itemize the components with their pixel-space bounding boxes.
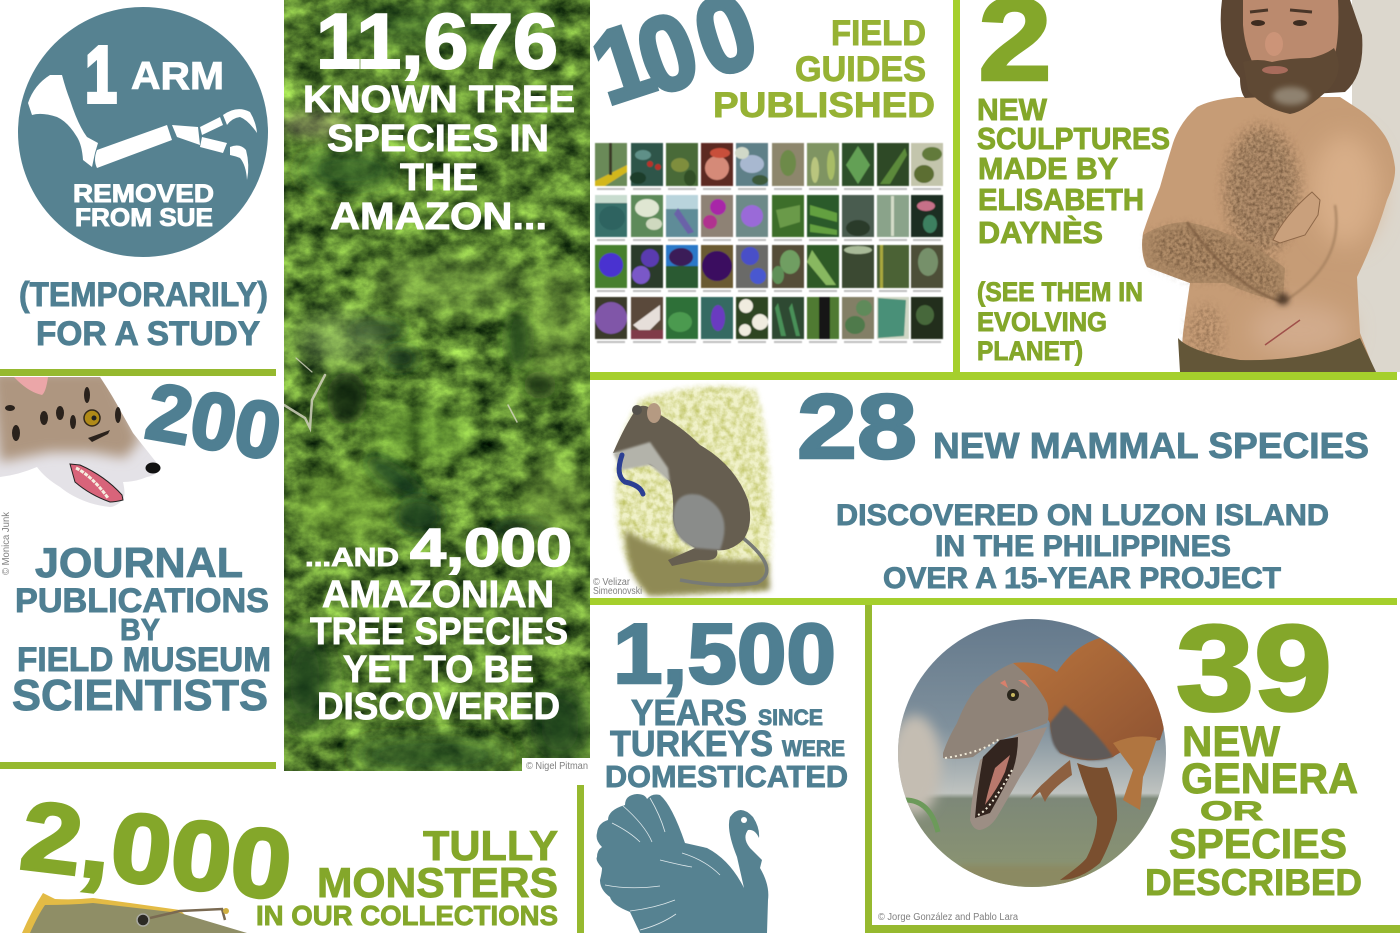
text: new sculptures: DAYNÈS bbox=[978, 215, 1103, 250]
illustration: wolf-like head bbox=[0, 377, 160, 507]
text: new sculptures: SCULPTURES bbox=[977, 121, 1170, 156]
panel: Sue arm bbox=[18, 7, 268, 257]
illustration: dinosaur in circle bbox=[889, 619, 1168, 887]
text: Luzon discovery: IN THE PHILIPPINES bbox=[935, 530, 1231, 563]
count: 1 arm: 1 bbox=[85, 30, 117, 119]
image grid: field guide plant photos bbox=[595, 143, 943, 343]
text: journal publications: JOURNAL bbox=[35, 539, 243, 586]
icon: turkey bbox=[597, 794, 768, 933]
text: new sculptures: MADE BY bbox=[978, 151, 1118, 186]
photo: Neanderthal sculpture bbox=[1142, 0, 1400, 372]
credit: Velizar Simeonovski: © Velizar bbox=[593, 577, 631, 588]
text: field guides published: FIELD bbox=[831, 14, 926, 53]
text: new genera or species described: NEW bbox=[1182, 718, 1280, 766]
text: new genera or species described: GENERA bbox=[1181, 755, 1358, 803]
text: temporarily for a study: (TEMPORARILY) bbox=[19, 276, 268, 314]
text: yet to be discovered bbox=[305, 518, 572, 728]
text: years since turkeys were domesticated bbox=[605, 692, 848, 794]
count: 200: 200 bbox=[140, 366, 287, 477]
text: field guides published: GUIDES bbox=[795, 50, 926, 89]
text: yet to be discovered: DISCOVERED bbox=[317, 686, 560, 728]
text: known tree species: KNOWN TREE bbox=[303, 79, 575, 121]
text: field guides published: PUBLISHED bbox=[713, 86, 935, 125]
illustration: Luzon shrew-rat bbox=[613, 387, 770, 596]
text: known tree species: THE bbox=[400, 157, 478, 199]
text: years since turkeys were domesticated: YEARS bbox=[631, 692, 747, 733]
count: 100 bbox=[579, 0, 771, 127]
label: removed from Sue: FROM SUE bbox=[75, 204, 213, 232]
text: journal publications: PUBLICATIONS bbox=[15, 582, 269, 620]
count: 2,000: 2,000 bbox=[16, 780, 298, 921]
illustration: Tully monster bbox=[22, 893, 247, 933]
text: years since turkeys were domesticated: TURKEYS bbox=[610, 723, 773, 764]
text: Luzon discovery bbox=[836, 499, 1329, 595]
count: 1,500: 1,500 bbox=[613, 607, 836, 702]
text: known tree species bbox=[303, 0, 575, 238]
text: years since turkeys were domesticated: SINCE bbox=[758, 705, 823, 730]
count: 39: 39 bbox=[1176, 600, 1332, 736]
credit: Monica Junk: © Monica Junk bbox=[1, 511, 12, 575]
text: new sculptures bbox=[977, 92, 1170, 250]
credit: Jorge González and Pablo Lara: © Jorge González and Pablo Lara bbox=[878, 912, 1018, 923]
text: known tree species: AMAZON... bbox=[330, 196, 547, 238]
text: see them in Evolving Planet: PLANET) bbox=[977, 336, 1083, 366]
text: journal publications: FIELD MUSEUM bbox=[17, 641, 271, 679]
circle badge bbox=[18, 7, 268, 257]
text: years since turkeys were domesticated: WERE bbox=[782, 736, 845, 761]
text: new genera or species described bbox=[1145, 718, 1362, 903]
text: yet to be discovered: 4,000 bbox=[410, 518, 572, 578]
text: Luzon discovery: DISCOVERED ON LUZON ISLAND bbox=[836, 499, 1329, 532]
count: 1 arm: ARM bbox=[131, 55, 224, 98]
text: journal publications: BY bbox=[120, 612, 160, 647]
text: new genera or species described: SPECIES bbox=[1169, 820, 1347, 867]
text: temporarily for a study bbox=[19, 276, 268, 353]
count: 100: 1 bbox=[579, 1, 666, 127]
count: 28 new mammal species: 28 bbox=[797, 376, 917, 478]
credit: Velizar Simeonovski: Simeonovski bbox=[593, 586, 642, 597]
credit: Nigel Pitman: © Nigel Pitman bbox=[526, 761, 588, 772]
text: temporarily for a study: FOR A STUDY bbox=[36, 315, 260, 353]
text: years since turkeys were domesticated: DOMESTICATED bbox=[605, 759, 848, 794]
text: journal publications: SCIENTISTS bbox=[12, 671, 268, 720]
text: yet to be discovered: TREE SPECIES bbox=[310, 611, 568, 653]
text: Tully monsters in our collections: IN OUR COLLECTIONS bbox=[256, 900, 558, 931]
text: new sculptures: ELISABETH bbox=[978, 182, 1144, 217]
text: Tully monsters in our collections: MONSTERS bbox=[317, 859, 558, 906]
panel: Amazon forest photo bbox=[279, 0, 591, 771]
text: journal publications bbox=[12, 539, 271, 720]
text: yet to be discovered: AMAZONIAN bbox=[322, 574, 554, 616]
text: yet to be discovered: YET TO BE bbox=[343, 649, 534, 691]
text: Luzon discovery: OVER A 15-YEAR PROJECT bbox=[883, 562, 1281, 595]
text: new sculptures: NEW bbox=[977, 92, 1048, 127]
text: Tully monsters in our collections: TULLY bbox=[423, 822, 558, 869]
text: field guides published bbox=[713, 14, 935, 125]
text: yet to be discovered: ...AND bbox=[305, 542, 399, 572]
count: 1 arm bbox=[85, 30, 224, 119]
text: Tully monsters in our collections bbox=[256, 822, 558, 931]
count: 28 new mammal species: NEW MAMMAL SPECIES bbox=[933, 425, 1369, 466]
text: see them in Evolving Planet bbox=[977, 277, 1143, 366]
text: new genera or species described: DESCRIBED bbox=[1145, 862, 1362, 903]
text: new genera or species described: OR bbox=[1200, 796, 1263, 826]
text: known tree species: SPECIES IN bbox=[327, 118, 549, 160]
text: see them in Evolving Planet: (SEE THEM IN bbox=[977, 277, 1143, 307]
label: removed from Sue: REMOVED bbox=[73, 180, 214, 208]
label: removed from Sue bbox=[73, 180, 214, 232]
credit: Velizar Simeonovski bbox=[593, 577, 642, 597]
text: see them in Evolving Planet: EVOLVING bbox=[977, 307, 1107, 337]
icon: arm bones bbox=[28, 75, 257, 180]
count: 28 new mammal species bbox=[797, 376, 1369, 478]
